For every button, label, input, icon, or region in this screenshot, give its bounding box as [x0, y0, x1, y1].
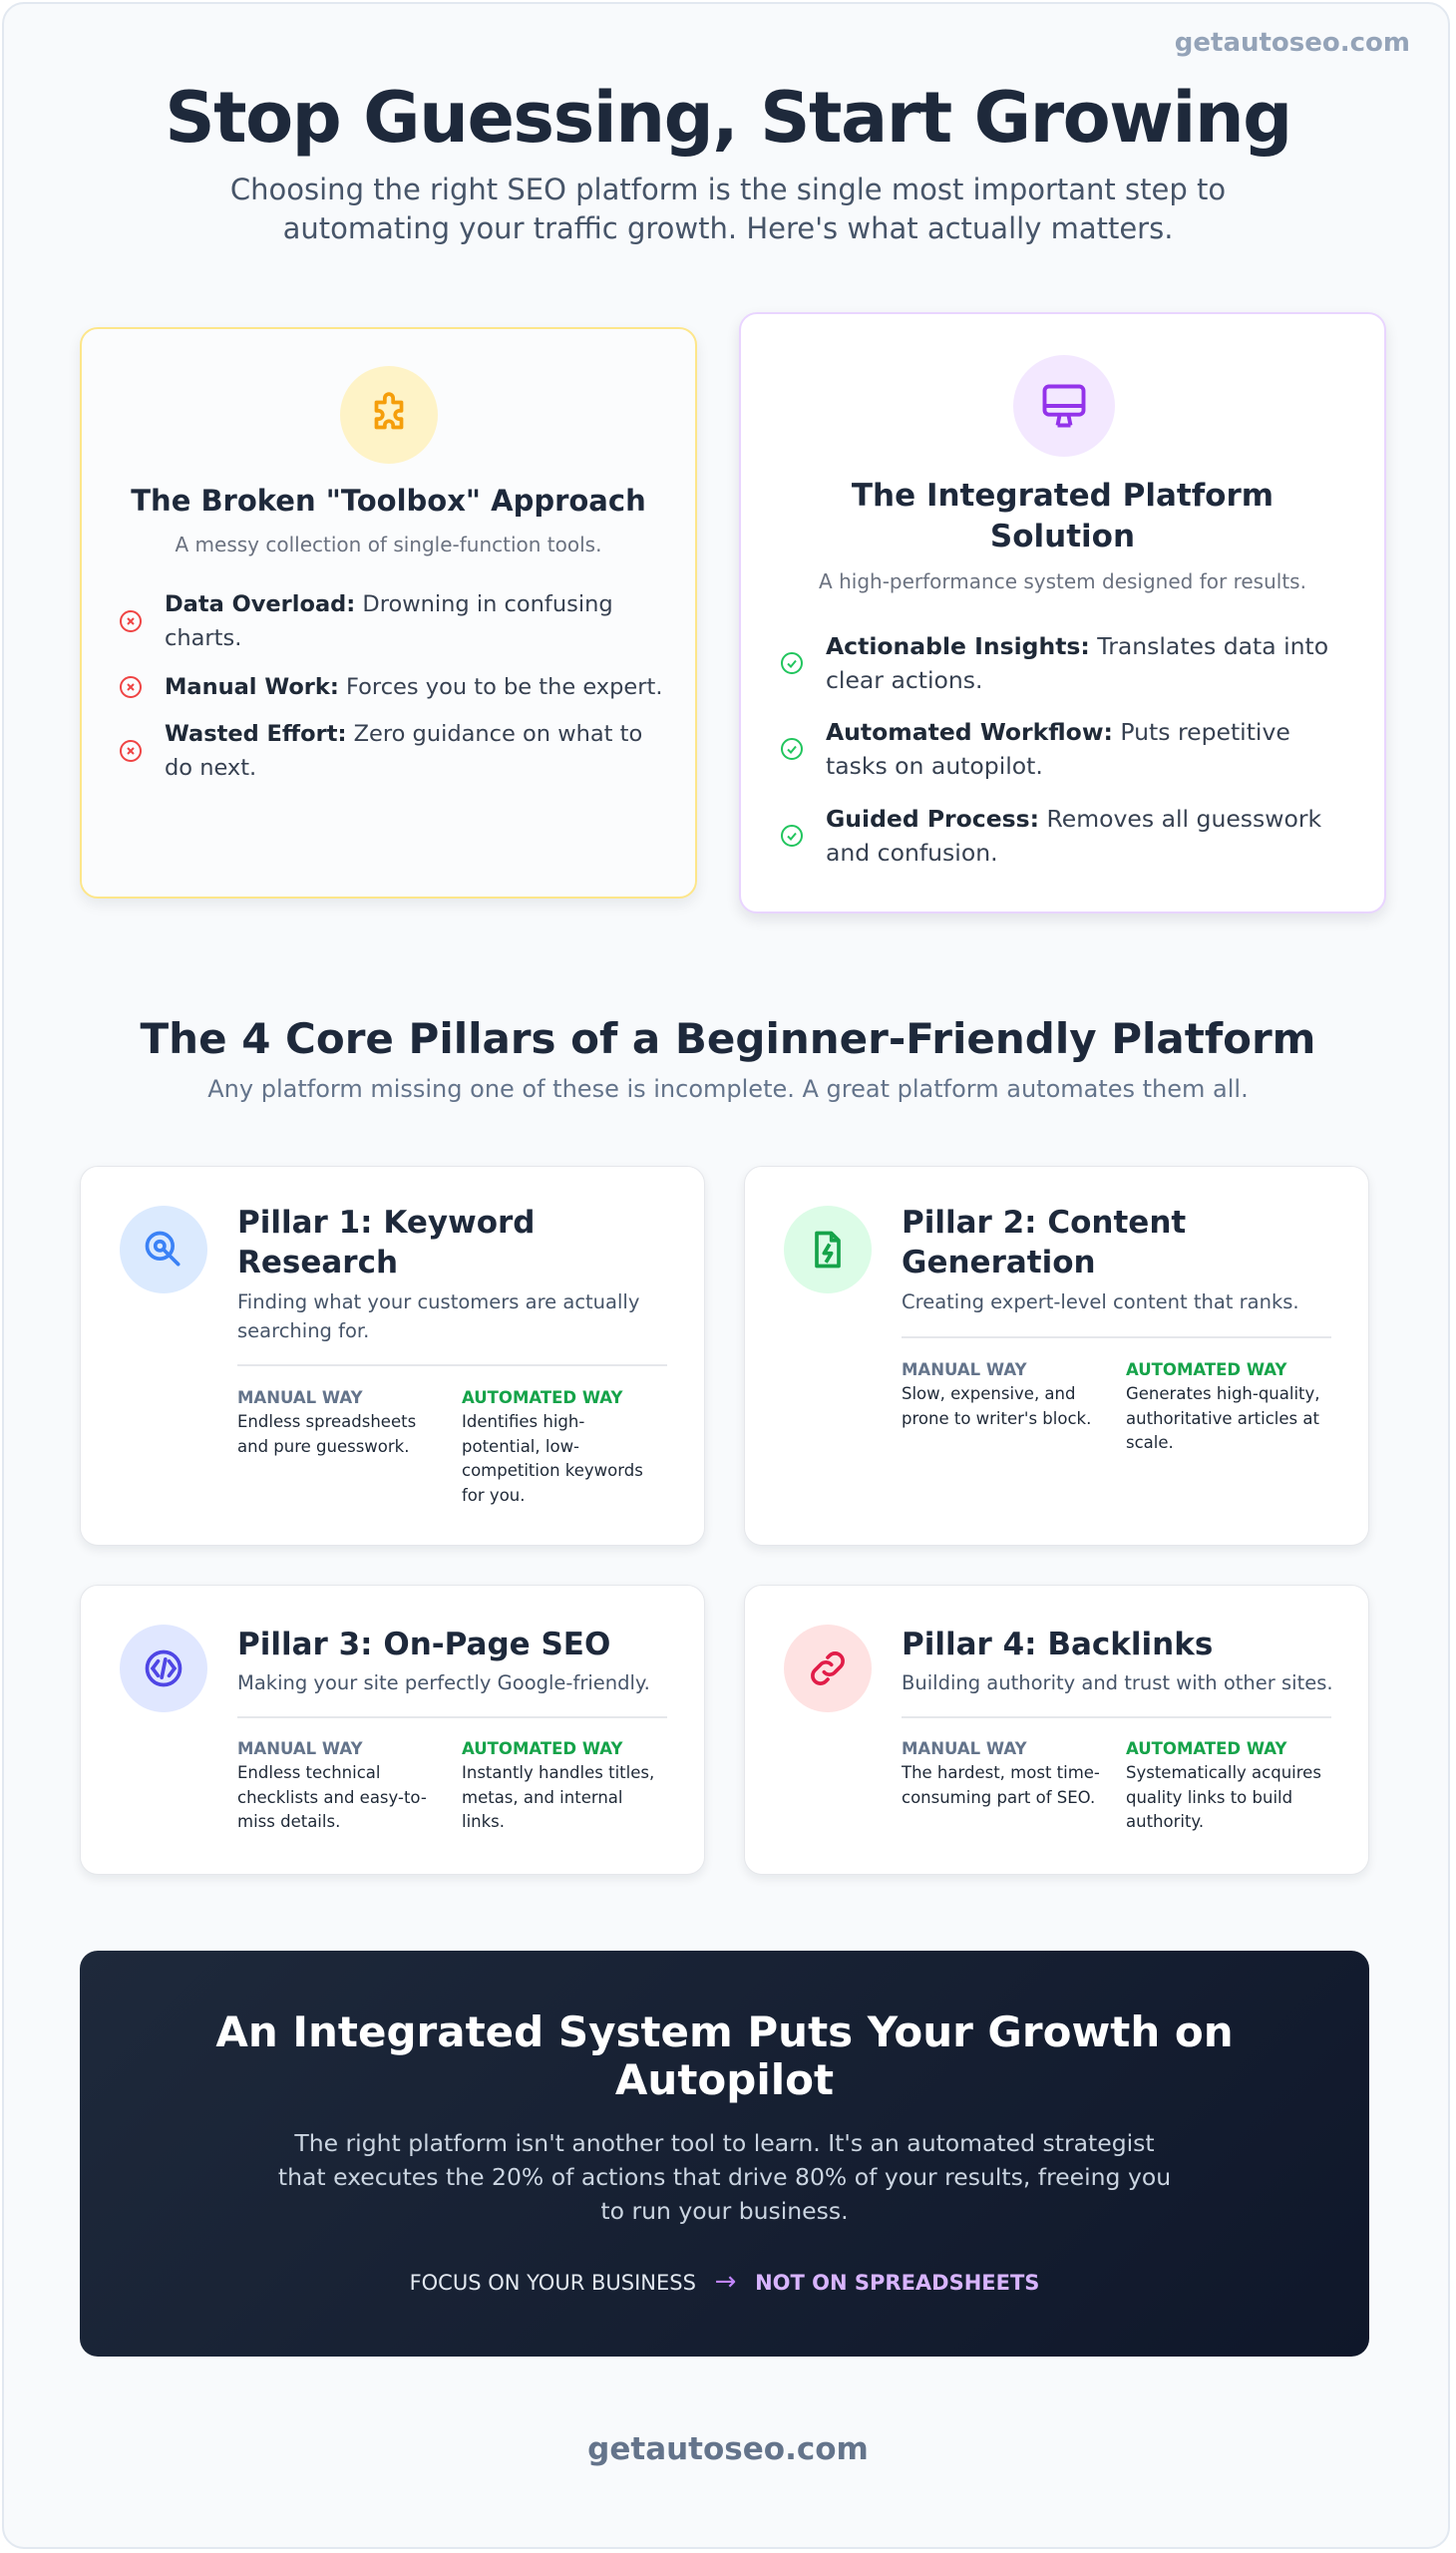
comparison: AUTOMATED WAY — [1126, 1360, 1286, 1379]
heading: The Integrated Platform Solution — [852, 478, 1274, 554]
comparison: AUTOMATED WAY — [1126, 1739, 1286, 1758]
list: problems: Manual Work: Forces you to be the expert. — [165, 674, 662, 700]
icon: link — [784, 1625, 872, 1712]
comparison: Systematically acquires quality links to build authority. — [1126, 1763, 1321, 1831]
panel: pillar 1 — [80, 1166, 705, 1546]
comparison: Identifies high-potential, low-competition keywords for you. — [462, 1412, 643, 1504]
subtitle: Choosing the right SEO platform is the single most important step to automating your traffic growth. Here's what actually matters. — [230, 173, 1226, 245]
title: Stop Guessing, Start Growing — [165, 77, 1291, 159]
subheading: A high-performance system designed for results. — [819, 569, 1306, 593]
CTA body: The right platform isn't another tool to learn. It's an automated strategist that executes the 20% of actions that drive 80% of your results, freeing you to run your business. — [278, 2129, 1171, 2225]
pillar title: Pillar 1: Keyword Research — [237, 1205, 535, 1280]
pillar description: Building authority and trust with other sites. — [902, 1671, 1333, 1694]
comparison: Endless technical checklists and easy-to-miss details. — [237, 1763, 427, 1831]
comparison — [237, 1739, 654, 1831]
comparison — [237, 1388, 643, 1504]
CTA heading: An Integrated System Puts Your Growth on Autopilot — [215, 2007, 1234, 2104]
pillar title: Pillar 4: Backlinks — [902, 1627, 1213, 1662]
icon: monitor — [1013, 355, 1115, 457]
comparison: Slow, expensive, and prone to writer's block. — [902, 1384, 1091, 1428]
comparison: MANUAL WAY — [902, 1739, 1027, 1758]
comparison: AUTOMATED WAY — [462, 1739, 622, 1758]
panel: broken toolbox — [80, 327, 697, 899]
list: benefits — [781, 632, 1328, 867]
comparison: Instantly handles titles, metas, and internal links. — [462, 1763, 654, 1831]
panel: pillar 3 — [80, 1585, 705, 1875]
pillar title: Pillar 3: On-Page SEO — [237, 1627, 610, 1662]
list: benefits: Actionable Insights: Translates data into clear actions. — [826, 632, 1328, 694]
comparison: Endless spreadsheets and pure guesswork. — [237, 1412, 416, 1456]
pillar description: Making your site perfectly Google-friendly. — [237, 1671, 650, 1694]
panel: pillar 2 — [744, 1166, 1369, 1546]
panel: integrated platform — [739, 312, 1386, 913]
subheading: A messy collection of single-function tools. — [176, 533, 601, 556]
icon: puzzle — [340, 366, 438, 464]
comparison: MANUAL WAY — [237, 1739, 363, 1758]
icon: code compass — [120, 1625, 207, 1712]
list: benefits: Guided Process: Removes all guesswork and confusion. — [826, 805, 1321, 867]
panel: pillar 4 — [744, 1585, 1369, 1875]
pillar description: Creating expert-level content that ranks. — [902, 1290, 1299, 1313]
comparison — [902, 1360, 1320, 1452]
section heading: pillars: The 4 Core Pillars of a Beginner-Friendly Platform — [141, 1014, 1315, 1063]
icon: search — [120, 1206, 207, 1293]
panel: CTA — [80, 1951, 1369, 2357]
comparison: Generates high-quality, authoritative articles at scale. — [1126, 1384, 1320, 1452]
CTA tagline: FOCUS ON YOUR BUSINESS → NOT ON SPREADSHEETS — [410, 2267, 1039, 2297]
icon: document — [784, 1206, 872, 1293]
pillar description: Finding what your customers are actually searching for. — [237, 1290, 639, 1342]
footer brand: getautoseo.com — [587, 2431, 869, 2467]
section subheading: Any platform missing one of these is incomplete. A great platform automates them all. — [207, 1075, 1249, 1103]
comparison — [902, 1739, 1321, 1831]
watermark top: getautoseo.com — [1175, 28, 1410, 58]
list: problems — [120, 591, 662, 781]
heading: The Broken "Toolbox" Approach — [131, 484, 646, 518]
list: benefits: Automated Workflow: Puts repetitive tasks on autopilot. — [826, 718, 1290, 780]
comparison: MANUAL WAY — [902, 1360, 1027, 1379]
comparison: The hardest, most time-consuming part of SEO. — [902, 1763, 1100, 1807]
list: problems: Data Overload: Drowning in confusing charts. — [165, 591, 613, 651]
comparison: MANUAL WAY — [237, 1388, 363, 1407]
comparison: AUTOMATED WAY — [462, 1388, 622, 1407]
list: problems: Wasted Effort: Zero guidance on what to do next. — [165, 721, 642, 781]
pillar title: Pillar 2: Content Generation — [902, 1205, 1186, 1280]
